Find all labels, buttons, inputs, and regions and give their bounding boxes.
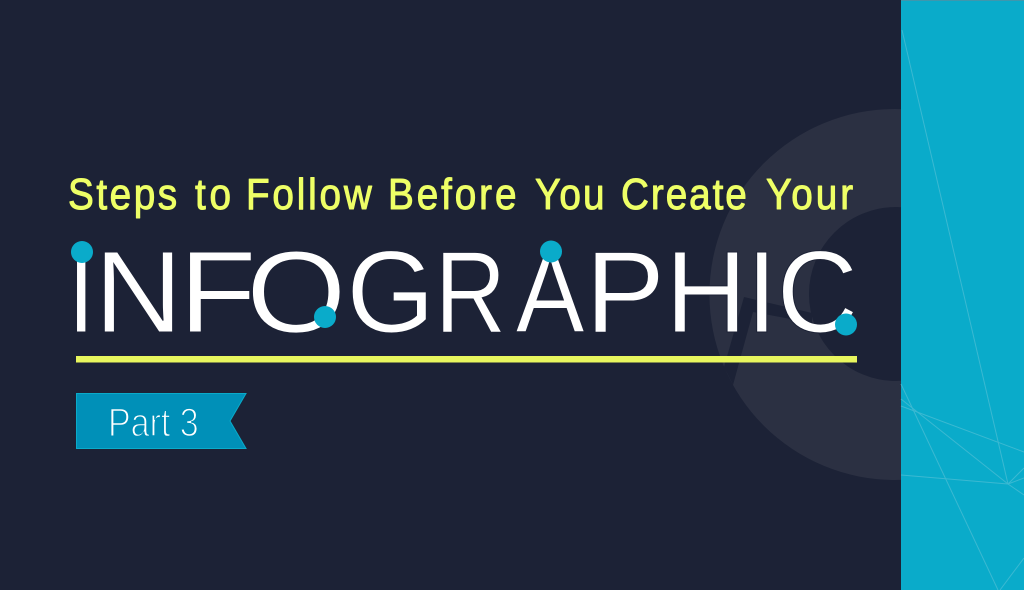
subtitle: Steps to Follow Before You Create Your: Create [621, 169, 747, 219]
main title: INFOGRAPHIC: O [246, 227, 346, 357]
subtitle: Steps to Follow Before You Create Your: Before [388, 169, 516, 219]
subtitle: Steps to Follow Before You Create Your: You [535, 169, 605, 219]
ribbon badge: Part 3: Part 3 [108, 399, 199, 445]
main title: INFOGRAPHIC: I [747, 227, 777, 357]
main title: INFOGRAPHIC [68, 227, 858, 357]
main title: INFOGRAPHIC: I [68, 227, 95, 357]
subtitle: Steps to Follow Before You Create Your: Your [766, 169, 853, 219]
yellow underline [76, 356, 857, 362]
subtitle: Steps to Follow Before You Create Your: to [195, 169, 231, 219]
main title: INFOGRAPHIC: R [435, 227, 506, 357]
subtitle: Steps to Follow Before You Create Your [68, 169, 853, 219]
subtitle: Steps to Follow Before You Create Your: Follow [246, 169, 373, 219]
main title: INFOGRAPHIC: G [346, 228, 435, 357]
main title: INFOGRAPHIC: N [94, 228, 183, 357]
main title: INFOGRAPHIC: P [585, 227, 665, 357]
subtitle: Steps to Follow Before You Create Your: Steps [68, 169, 177, 219]
ribbon badge: Part 3 [76, 394, 246, 448]
main title: INFOGRAPHIC: F [179, 227, 256, 357]
main title: INFOGRAPHIC: A [516, 228, 584, 357]
main title: INFOGRAPHIC: C [777, 228, 858, 357]
background ring logo [709, 109, 1024, 480]
main title: INFOGRAPHIC: H [666, 228, 747, 357]
right teal panel [901, 0, 1024, 590]
teal dots on letters [71, 240, 857, 336]
